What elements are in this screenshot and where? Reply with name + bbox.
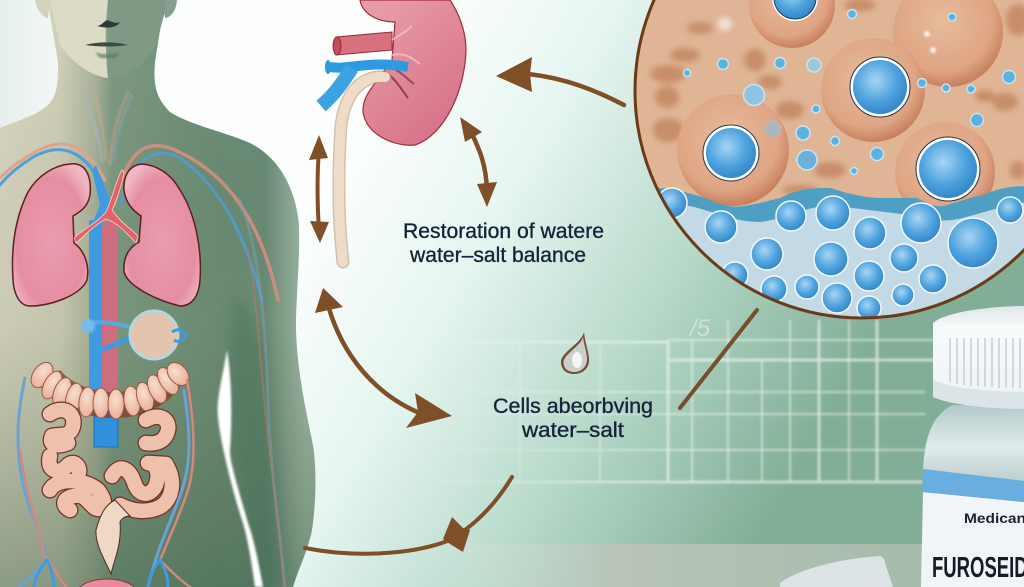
text: cells absorbing: Cells abeorbving <box>493 395 653 418</box>
water surface band <box>655 186 1024 222</box>
ears <box>35 0 177 18</box>
neck vessels <box>82 90 132 165</box>
arrow: vertical double-headed <box>309 135 329 243</box>
bottle label body <box>921 492 1024 587</box>
water pool <box>658 188 1024 316</box>
text: restoration of balance: water–salt balance <box>409 244 586 267</box>
rectum <box>96 500 130 574</box>
kidney folds <box>385 26 420 98</box>
text: cells absorbing <box>493 395 653 442</box>
text: restoration of balance: Restoration of watere <box>403 220 604 243</box>
shoulder vessels <box>0 144 285 587</box>
arrow: kidney to text double-headed <box>460 117 497 207</box>
water bubbles <box>657 188 1023 320</box>
kidney illustration <box>321 0 466 262</box>
right lung <box>124 164 200 306</box>
medicine tablet <box>780 556 893 587</box>
cap collar <box>933 375 1024 409</box>
text: cells absorbing: water–salt <box>521 419 624 442</box>
blue label band <box>922 469 1024 502</box>
tissue background <box>636 0 1024 207</box>
magnified cell lens <box>630 0 1024 330</box>
ureter <box>339 77 385 262</box>
bottle cap <box>933 306 1024 392</box>
main vessels <box>74 165 138 447</box>
gap between torso and arm <box>218 350 263 587</box>
transverse colon <box>27 358 193 419</box>
medicine bottle <box>921 306 1024 587</box>
icon: water droplet <box>561 332 589 374</box>
arrow: body to cells double-headed <box>315 288 452 428</box>
background wall grid <box>400 320 935 482</box>
kidney body <box>360 0 466 145</box>
faint wall number: /5 <box>688 315 711 342</box>
label text: medican: Medican <box>964 510 1024 526</box>
text: restoration of balance <box>403 220 604 267</box>
renal vein <box>321 60 408 106</box>
left lung <box>12 164 90 306</box>
abdominal vessels <box>18 378 194 587</box>
cell inset with connectors <box>81 311 186 359</box>
human body illustration <box>0 0 315 587</box>
bottle shoulder <box>923 405 1024 481</box>
background floor <box>420 544 1024 587</box>
lens ring <box>635 0 1024 318</box>
artery opening <box>333 37 341 55</box>
renal artery <box>336 32 392 55</box>
bladder <box>78 579 136 587</box>
tissue cell without nucleus <box>893 0 1003 87</box>
floating water droplets <box>684 10 1016 174</box>
tissue cell with nucleus, centre <box>821 38 925 142</box>
small intestine <box>49 410 172 511</box>
arm shadow <box>229 290 285 587</box>
body silhouette <box>0 0 315 587</box>
face features and shading <box>50 0 166 78</box>
arrow: cells to kidney <box>496 57 624 105</box>
tissue cell with nucleus, left <box>677 94 789 206</box>
tissue cell with nucleus, top <box>749 0 835 48</box>
arrow: bottle to body <box>305 477 512 554</box>
connector line: lens to cells text <box>680 310 757 408</box>
tissue cell with nucleus, lower right <box>895 122 995 206</box>
